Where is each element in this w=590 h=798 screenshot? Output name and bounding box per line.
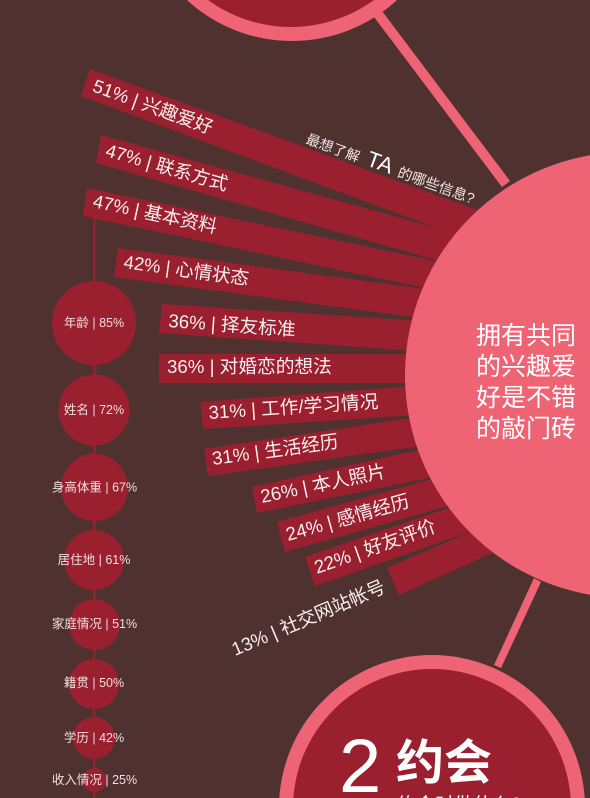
bar: 24% relationship history: 24% | 感情经历 — [283, 490, 412, 545]
bar: 36% partner criteria: 36% | 择友标准 — [168, 310, 296, 340]
bubble: income 25% — [52, 768, 137, 792]
takeaway text: 的兴趣爱 — [476, 353, 576, 381]
bubble: age 85%: 年龄 | 85% — [64, 316, 124, 330]
bar: 47% contact: 47% | 联系方式 — [103, 140, 230, 195]
bar: 42% mood — [114, 248, 425, 318]
bar: 51% interests — [81, 69, 480, 235]
takeaway text: 的敲门砖 — [476, 415, 576, 443]
bar: 24% relationship history — [277, 477, 455, 552]
bubble: name 72% — [58, 374, 130, 446]
bubble: education 42%: 学历 | 42% — [64, 730, 124, 745]
bar: 31% work and study: 31% | 工作/学习情况 — [208, 391, 379, 423]
bar: 13% social accounts: 13% | 社交网站帐号 — [228, 576, 388, 660]
bubble: name 72%: 姓名 | 72% — [64, 402, 124, 417]
bubble: native place 50%: 籍贯 | 50% — [64, 675, 124, 690]
chart caption: 最想了解TA的哪些信息? — [303, 124, 479, 209]
vertical timeline line — [93, 216, 96, 798]
takeaway text: 拥有共同 — [476, 322, 576, 350]
connector line: big circle to bottom circle — [494, 578, 541, 668]
bubble: education 42% — [64, 717, 124, 759]
bubble: native place 50% — [64, 659, 124, 709]
bar: 51% interests: 51% | 兴趣爱好 — [90, 75, 216, 138]
bar: 13% social accounts — [228, 529, 501, 660]
bar: 47% basic profile: 47% | 基本资料 — [91, 190, 219, 237]
bar: 31% work and study — [201, 386, 418, 429]
bubble: family 51%: 家庭情况 | 51% — [52, 616, 137, 631]
bubble: family 51% — [52, 599, 137, 650]
bar: 36% thoughts on marriage: 36% | 对婚恋的想法 — [167, 356, 332, 377]
section title: 约会 — [396, 737, 492, 790]
bubble: height and weight 67%: 身高体重 | 67% — [52, 480, 137, 494]
takeaway text: 好是不错 — [476, 384, 576, 412]
bubble: income 25%: 收入情况 | 25% — [52, 773, 137, 787]
panel: bubble list of basic details — [52, 281, 137, 792]
bubble: height and weight 67% — [52, 454, 137, 521]
bubble: age 85% — [52, 281, 136, 365]
bar: 36% thoughts on marriage — [159, 354, 415, 383]
bar: 47% basic profile — [83, 188, 440, 288]
bottom circle: section 2 dating — [279, 655, 585, 798]
panel: fan bar chart of wanted information — [81, 69, 501, 660]
bar: 26% photos — [252, 448, 438, 513]
bubble: residence 61%: 居住地 | 61% — [58, 553, 130, 567]
bar: 31% life experience — [204, 417, 427, 476]
bar: 22% friends' reviews: 22% | 好友评价 — [311, 515, 439, 578]
bar: 42% mood: 42% | 心情状态 — [122, 251, 250, 289]
big pink circle with takeaway — [405, 152, 590, 598]
bubble: residence 61% — [58, 530, 130, 590]
bar: 22% friends' reviews — [305, 505, 475, 586]
bar: 26% photos: 26% | 本人照片 — [259, 460, 388, 507]
bar: 31% life experience: 31% | 生活经历 — [211, 431, 340, 469]
connector line: top circle to big circle — [374, 11, 510, 187]
bar: 47% contact — [96, 135, 458, 261]
top circle: previous section — [137, 0, 447, 41]
bar: 36% partner criteria — [159, 304, 422, 351]
